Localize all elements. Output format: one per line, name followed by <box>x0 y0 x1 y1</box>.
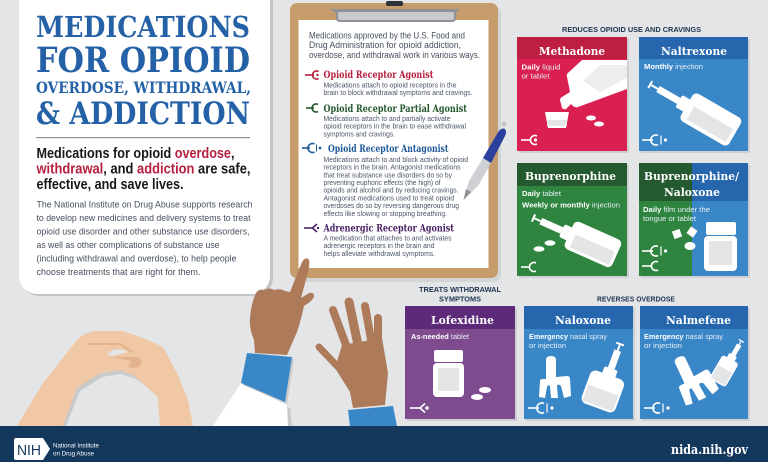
lead statement <box>36 146 250 193</box>
card: methadone: Daily liquid <box>522 62 560 72</box>
opioid receptor antagonist: effects like slowing or stopping breathing. <box>324 211 447 218</box>
body text: as well as other complications of substance use <box>36 240 220 251</box>
NIH logo <box>14 438 99 460</box>
panel: introduction <box>19 0 273 296</box>
lead statement: withdrawal, and addiction are safe, <box>36 162 250 178</box>
section heading: treats withdrawal symptoms: TREATS WITHDRAWAL <box>419 285 501 294</box>
title: FOR OPIOID <box>36 40 250 81</box>
open hand with sleeve <box>319 302 397 426</box>
NIH logo: on Drug Abuse <box>53 450 94 458</box>
card: nalmefene: Nalmefene <box>666 313 731 327</box>
icon: adrenergic receptor <box>410 404 428 412</box>
body text <box>36 200 252 278</box>
card: naloxone: Emergency nasal spray <box>529 332 607 341</box>
icon: agonist receptor <box>521 136 537 145</box>
intro text <box>309 30 480 60</box>
card: buprenorphine naloxone: tongue or tablet <box>643 214 697 223</box>
icon: antagonist receptor <box>644 403 670 413</box>
card: naloxone: or injection <box>529 341 566 350</box>
icon: antagonist receptor <box>642 246 667 256</box>
icon: bottle and syringe <box>580 337 637 414</box>
opioid receptor partial agonist: opioid receptors in the brain to ease withdrawal <box>324 124 466 130</box>
section heading: treats withdrawal symptoms: SYMPTOMS <box>439 294 481 304</box>
opioid receptor antagonist: preventing euphoric effects (the high) of <box>324 180 441 187</box>
icon: nasal spray <box>539 356 571 398</box>
opioid receptor antagonist: overdoses do so by reversing dangerous drug <box>324 203 459 210</box>
icon: syringe, bottle and tablets <box>527 204 623 269</box>
card: methadone <box>517 37 629 153</box>
opioid receptor partial agonist: Opioid Receptor Partial Agonist <box>324 104 467 115</box>
icon: methadone bottle, cup and tablets <box>545 60 627 128</box>
opioid receptor antagonist: receptors in the brain. Antagonist medications <box>324 164 461 172</box>
card: lofexidine <box>405 306 517 421</box>
card: lofexidine: Lofexidine <box>431 313 494 327</box>
opioid receptor agonist: Opioid Receptor Agonist <box>324 70 434 81</box>
opioid receptor agonist: Medications attach to opioid receptors in the <box>324 82 457 90</box>
card: naltrexone: Naltrexone <box>661 44 727 58</box>
opioid receptor antagonist: Medications attach to and block activity of opioid <box>324 157 468 164</box>
card: buprenorphine: Weekly or monthly injection <box>522 200 620 210</box>
lead statement: effective, and save lives. <box>36 177 184 193</box>
intro text: Medications approved by the U.S. Food and <box>309 30 465 40</box>
opioid receptor antagonist <box>302 144 468 218</box>
body text: The National Institute on Drug Abuse supports research <box>36 200 252 210</box>
icon: partial agonist receptor <box>642 262 658 270</box>
footer <box>0 426 768 462</box>
card: nalmefene <box>640 306 750 421</box>
icon: small bottle and syringe <box>709 336 750 387</box>
card: buprenorphine: Daily tablet <box>522 189 562 198</box>
opioid receptor antagonist: that treat substance use disorders do so by <box>324 172 453 179</box>
clipboard <box>290 1 501 282</box>
adrenergic receptor agonist <box>304 224 454 258</box>
card: naloxone <box>524 306 637 421</box>
card: methadone: or tablet <box>522 72 550 80</box>
body text: (including withdrawal and overdose), to help people <box>36 254 236 264</box>
website: nida.nih.gov <box>671 443 748 458</box>
icon: partial agonist receptor <box>521 262 536 272</box>
adrenergic receptor agonist: adrenergic receptors in the brain and <box>324 243 435 250</box>
title <box>36 10 251 132</box>
intro text: overdose, and withdrawal work in various ways. <box>309 50 480 60</box>
icon: antagonist receptor <box>642 135 667 145</box>
intro text: Drug Administration for opioid addiction, <box>309 40 461 50</box>
card: nalmefene: Emergency nasal spray <box>644 332 723 341</box>
icon: nasal spray <box>666 347 720 407</box>
card: buprenorphine naloxone: Daily film under the <box>643 205 710 214</box>
opioid receptor partial agonist <box>306 104 467 138</box>
card: buprenorphine naloxone: Buprenorphine/ <box>644 169 740 183</box>
card: methadone: Methadone <box>539 44 605 58</box>
section heading: treats withdrawal symptoms <box>419 285 501 304</box>
card: naltrexone: Monthly injection <box>644 62 703 71</box>
opioid receptor partial agonist: Medications attach to and partially activate <box>324 116 451 123</box>
icon: bottle and tablets <box>433 350 491 400</box>
icon: syringe and bottle <box>641 70 743 147</box>
opioid receptor agonist <box>305 70 473 97</box>
opioid receptor antagonist: Opioid Receptor Antagonist <box>328 144 449 155</box>
adrenergic receptor agonist: Adrenergic Receptor Agonist <box>323 224 454 234</box>
card: naloxone: Naloxone <box>555 313 611 327</box>
title: & ADDICTION <box>36 96 250 132</box>
card: nalmefene: or injection <box>644 341 682 350</box>
icon: antagonist receptor <box>528 403 554 413</box>
card: buprenorphine naloxone <box>639 163 750 278</box>
adrenergic receptor agonist: A medication that attaches to and activates <box>324 236 452 242</box>
opioid receptor agonist: brain to block withdrawal symptoms and cravings. <box>324 90 473 97</box>
opioid receptor antagonist: opioids and alcohol and by reducing cravings. <box>324 188 459 195</box>
opioid receptor antagonist: Antagonist medications used to treat opioid <box>324 196 454 202</box>
lead statement: Medications for opioid overdose, <box>36 146 234 162</box>
body text: choose treatments that are right for them. <box>36 267 200 278</box>
section heading: reduces opioid use and cravings: REDUCES OPIOID USE AND CRAVINGS <box>562 25 701 34</box>
adrenergic receptor agonist: helps alleviate withdrawal symptoms. <box>324 251 435 258</box>
opioid receptor partial agonist: symptoms and cravings. <box>324 131 395 138</box>
card: lofexidine: As-needed tablet <box>411 332 470 341</box>
NIH logo: NIH <box>17 442 41 459</box>
card: buprenorphine <box>517 163 629 278</box>
icon: bottle and films <box>672 222 737 271</box>
section heading: reverses overdose: REVERSES OVERDOSE <box>597 294 675 304</box>
left hands <box>17 331 193 426</box>
card: buprenorphine naloxone: Naloxone <box>664 185 720 199</box>
title: MEDICATIONS <box>36 10 250 44</box>
pen <box>464 122 506 200</box>
NIH logo: National Institute <box>53 442 99 450</box>
body text: opioid use disorder and other substance use disorders, <box>36 226 250 238</box>
title: OVERDOSE, WITHDRAWAL, <box>36 78 251 97</box>
card: buprenorphine: Buprenorphine <box>525 169 616 183</box>
body text: to develop new medicines and delivery systems to treat <box>36 213 251 224</box>
card: naltrexone <box>639 37 750 153</box>
pointing hand with coat sleeve <box>213 258 314 426</box>
